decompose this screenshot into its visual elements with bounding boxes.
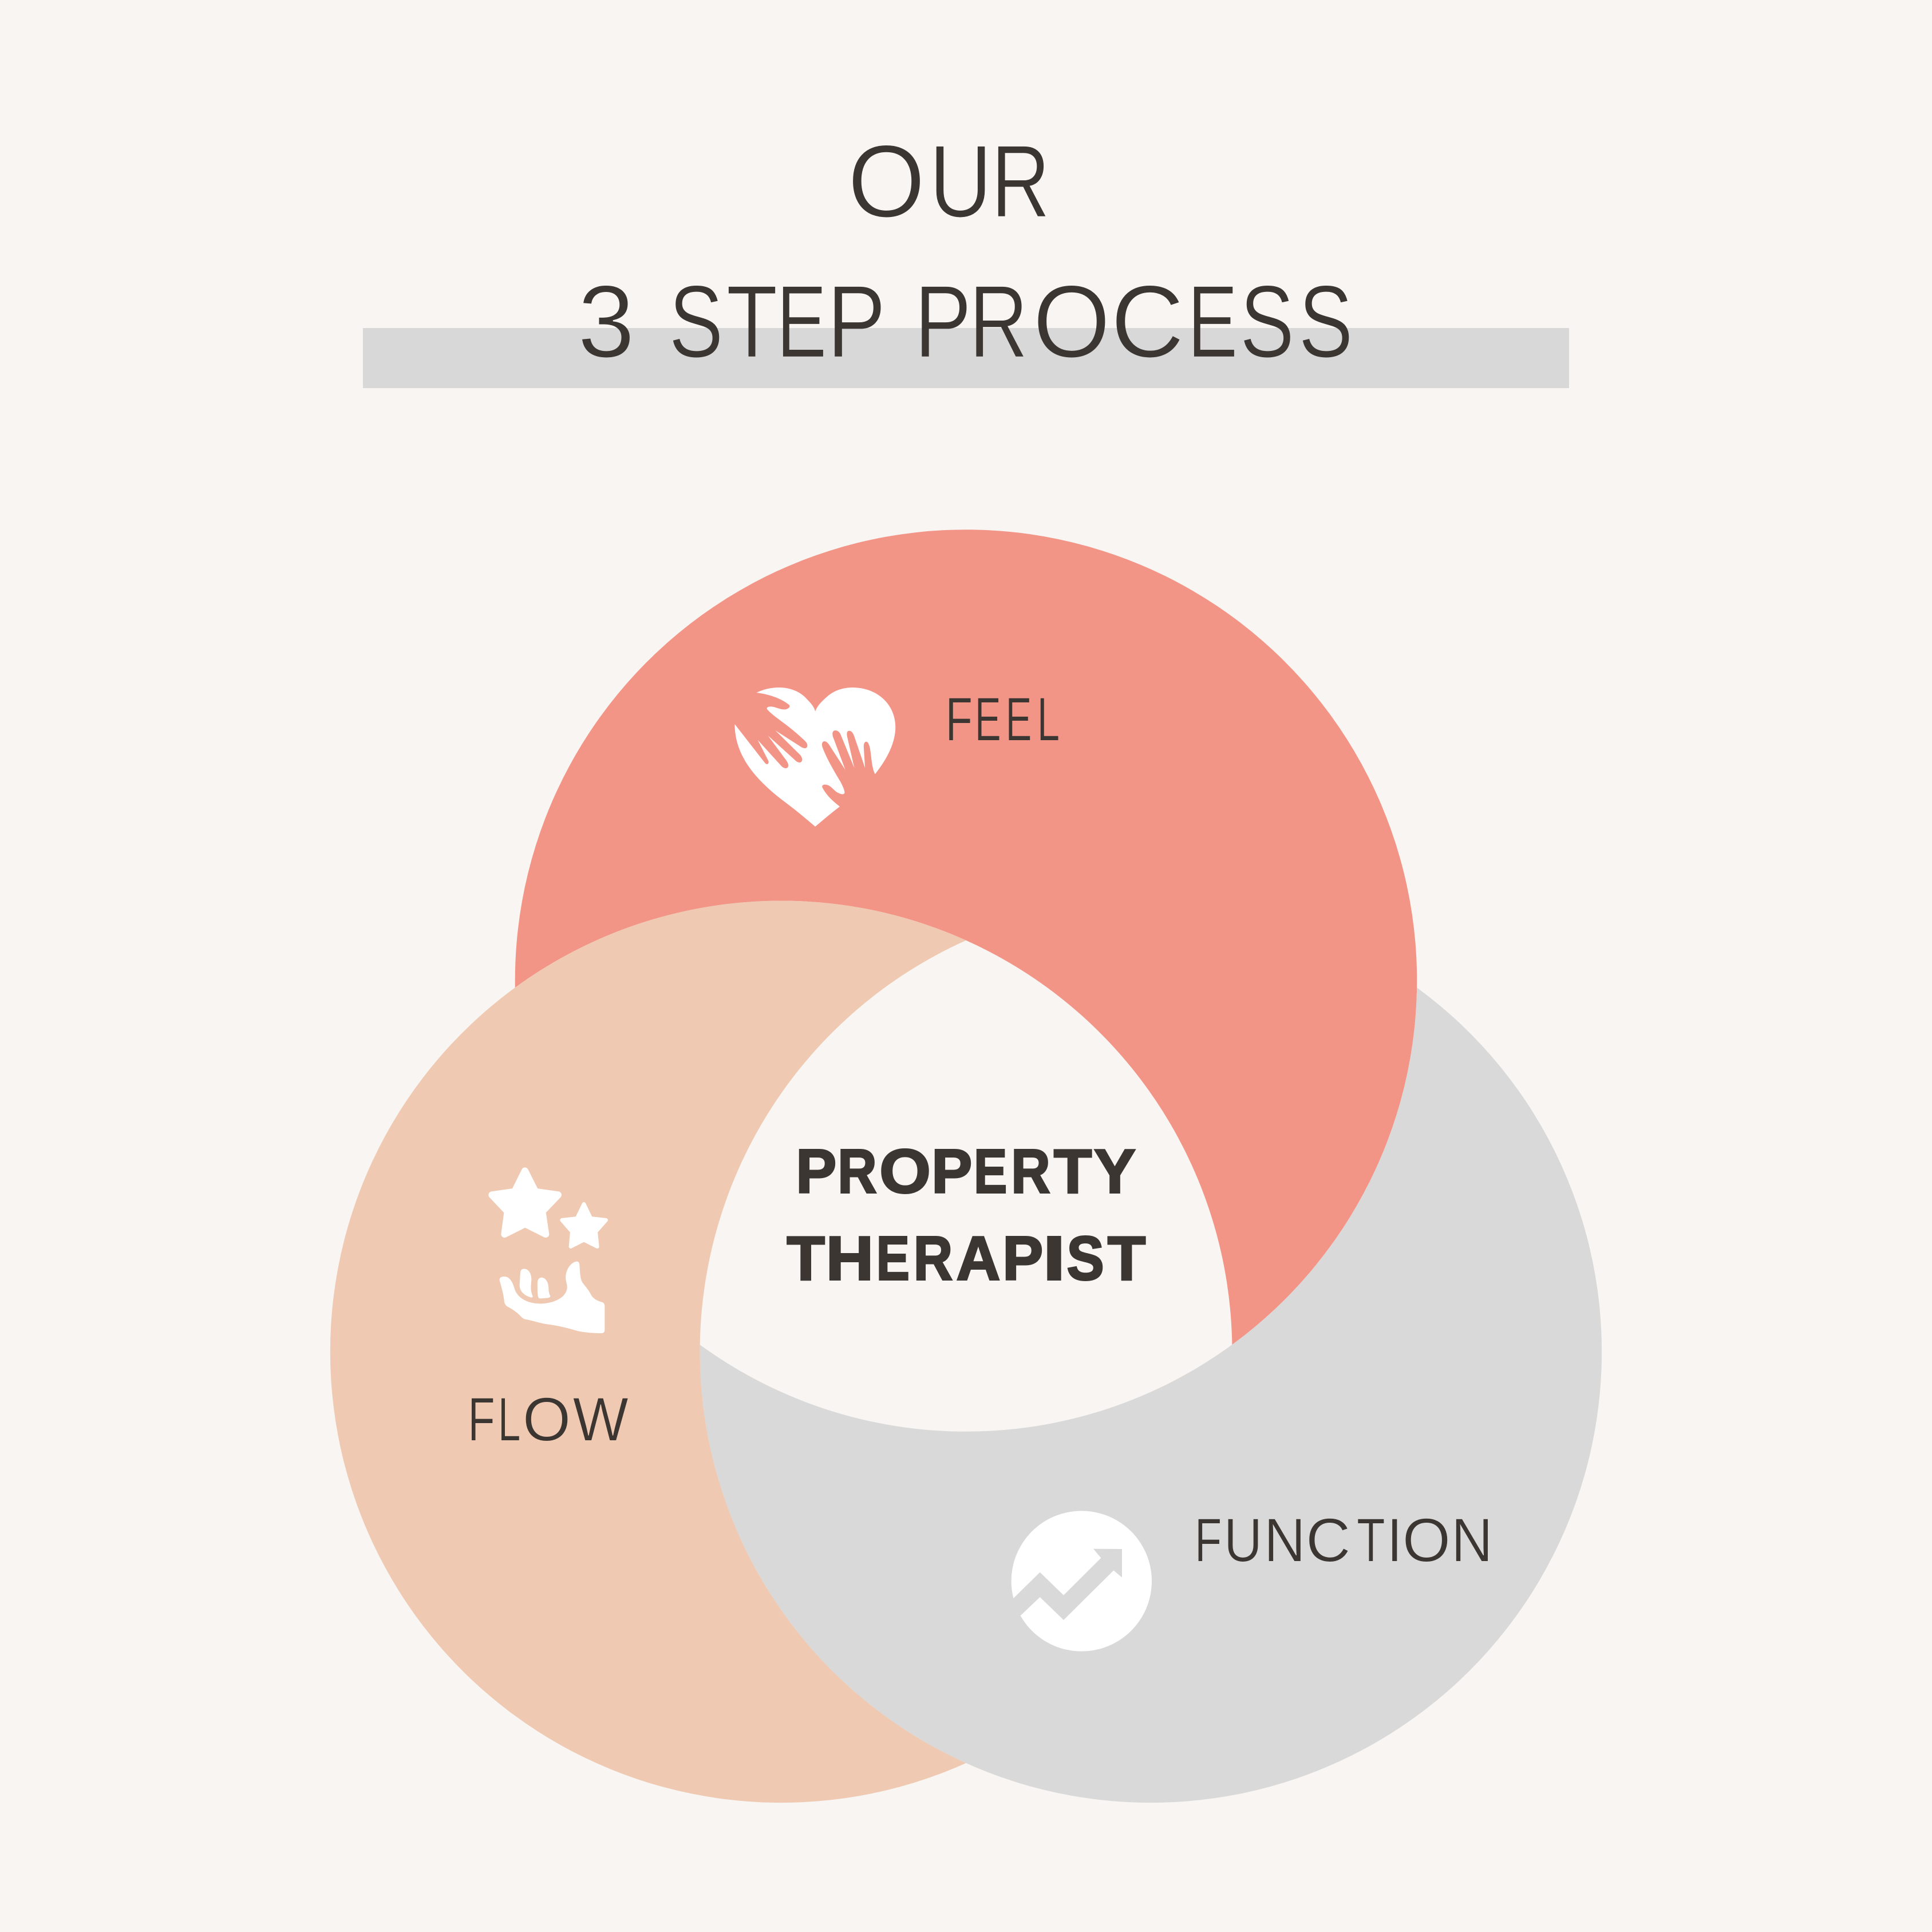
finger one bbox=[520, 1269, 533, 1298]
center label: I bbox=[1043, 1224, 1065, 1294]
label: function: N bbox=[1451, 1506, 1493, 1574]
title: R bbox=[969, 264, 1028, 380]
center label: O bbox=[879, 1137, 931, 1207]
center label: A bbox=[956, 1224, 1001, 1294]
center label: T bbox=[1054, 1137, 1092, 1207]
title: O bbox=[848, 124, 925, 239]
title: P bbox=[914, 264, 971, 380]
small star bbox=[562, 1204, 606, 1247]
center label: E bbox=[974, 1137, 1007, 1207]
label: feel: E bbox=[975, 685, 1001, 753]
title: S bbox=[1298, 264, 1353, 380]
label: feel: F bbox=[946, 685, 973, 753]
center label: P bbox=[1002, 1224, 1043, 1294]
center label: H bbox=[826, 1224, 874, 1294]
icon: growth arrow in circle bbox=[1002, 1511, 1152, 1652]
circle: flow bbox=[330, 901, 966, 1803]
label: feel: E bbox=[1005, 685, 1032, 753]
title: O bbox=[1033, 264, 1111, 380]
title: 3 bbox=[578, 264, 635, 380]
title: R bbox=[991, 124, 1050, 239]
label: function: N bbox=[1264, 1506, 1305, 1574]
finger two bbox=[538, 1278, 550, 1298]
label: flow: L bbox=[498, 1384, 521, 1454]
title: U bbox=[929, 124, 992, 239]
center label: E bbox=[876, 1224, 910, 1294]
disc bbox=[1012, 1511, 1152, 1652]
arrow bbox=[1002, 1549, 1122, 1622]
label: flow: O bbox=[523, 1384, 571, 1454]
label: flow: W bbox=[573, 1384, 629, 1454]
icon: stars over open hand bbox=[492, 1171, 606, 1333]
center label: T bbox=[787, 1224, 825, 1294]
title: S bbox=[1240, 264, 1294, 380]
circle: function bbox=[700, 987, 1602, 1803]
center label: P bbox=[796, 1137, 836, 1207]
icon: heart formed by two hands bbox=[734, 688, 895, 827]
title: S bbox=[669, 264, 724, 380]
circle: feel bbox=[515, 530, 1417, 1345]
open hand bbox=[500, 1262, 605, 1333]
label: function: O bbox=[1402, 1506, 1451, 1574]
center label: R bbox=[914, 1224, 953, 1294]
label: function: T bbox=[1357, 1506, 1385, 1574]
title: P bbox=[827, 264, 884, 380]
center label: R bbox=[1011, 1137, 1050, 1207]
center label bbox=[787, 1137, 1145, 1294]
title bbox=[578, 124, 1353, 380]
label: function: F bbox=[1195, 1506, 1222, 1574]
label: flow: F bbox=[468, 1384, 495, 1454]
center label: Y bbox=[1094, 1137, 1136, 1207]
center label: P bbox=[931, 1137, 972, 1207]
center label: T bbox=[1108, 1224, 1145, 1294]
title: E bbox=[1187, 264, 1238, 380]
title highlight bar bbox=[363, 328, 1569, 388]
venn diagram bbox=[330, 530, 1602, 1803]
label: function: I bbox=[1387, 1506, 1402, 1574]
large star bbox=[492, 1171, 558, 1234]
title: T bbox=[726, 264, 777, 380]
title: E bbox=[776, 264, 827, 380]
label: function: C bbox=[1306, 1506, 1350, 1574]
center label: S bbox=[1066, 1224, 1104, 1294]
center label: R bbox=[837, 1137, 877, 1207]
label: function: U bbox=[1224, 1506, 1262, 1574]
title: C bbox=[1111, 264, 1184, 380]
label: feel: L bbox=[1037, 685, 1060, 753]
